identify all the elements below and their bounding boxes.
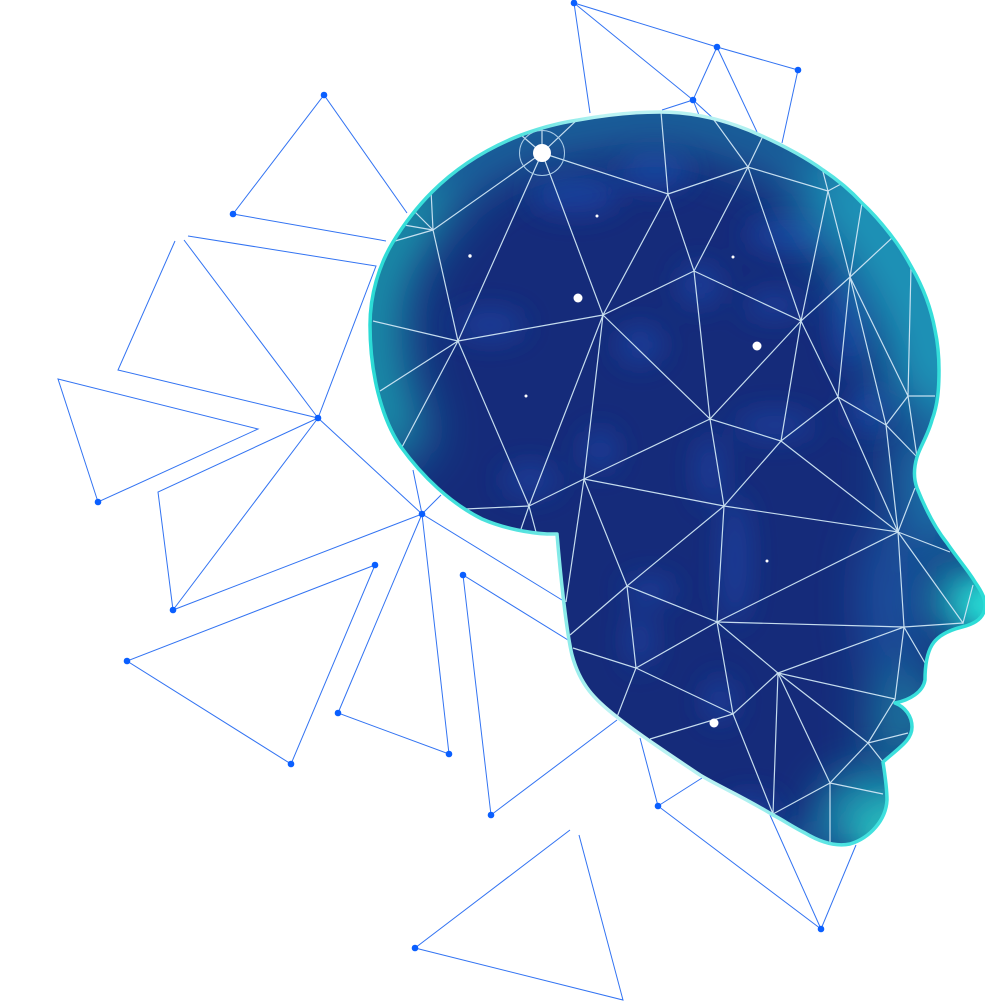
head: bright nose and chin glows — [853, 579, 985, 860]
head: white dots — [468, 144, 768, 728]
head: white polygon mesh — [373, 112, 973, 842]
head: wide nose and chin glows — [770, 562, 985, 859]
head: cyan outline — [370, 112, 985, 845]
head: ring around main dot — [520, 130, 564, 176]
head: gradient fill — [360, 100, 985, 860]
head: teal edge glows — [370, 112, 947, 762]
network: external blue nodes — [95, 0, 824, 951]
